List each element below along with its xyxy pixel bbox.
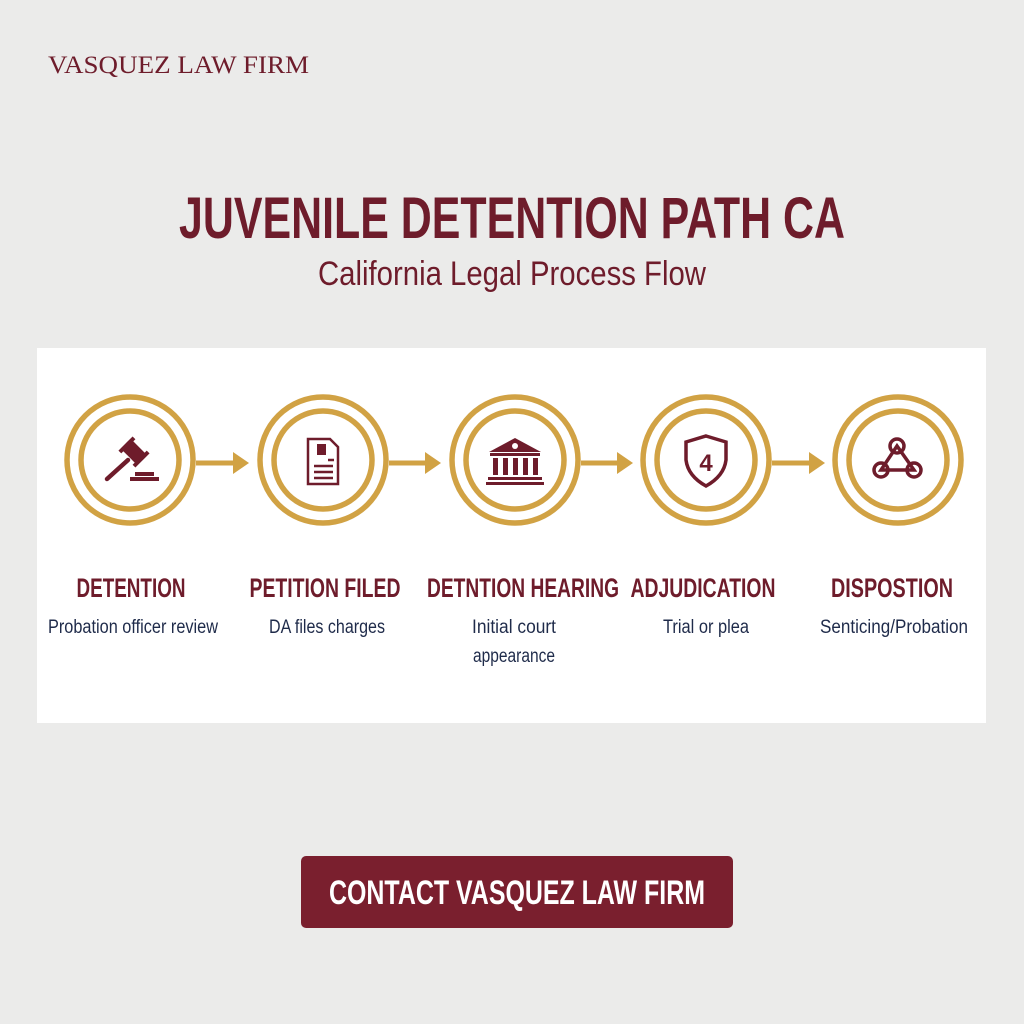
icon: courthouse bbox=[486, 438, 544, 485]
step labels: PETITION FILED bbox=[250, 573, 400, 603]
CTA button: CONTACT VASQUEZ LAW FIRM bbox=[329, 874, 705, 912]
step labels: DISPOSTION bbox=[831, 573, 953, 603]
panel: process flow bbox=[37, 348, 986, 723]
arrows bbox=[196, 452, 825, 474]
CTA button bbox=[301, 856, 733, 928]
step labels: Initial court bbox=[472, 617, 557, 638]
icon: gavel bbox=[107, 436, 159, 481]
step labels: Probation officer review bbox=[48, 617, 218, 638]
step labels: appearance bbox=[473, 646, 555, 667]
step labels: DETNTION HEARING bbox=[427, 573, 619, 603]
step labels: Trial or plea bbox=[663, 617, 749, 638]
icon: document bbox=[308, 439, 338, 484]
icon: shield 4: 4 bbox=[699, 450, 713, 477]
step labels: ADJUDICATION bbox=[630, 573, 776, 603]
step labels: DETENTION bbox=[76, 573, 186, 603]
icon: network triangle bbox=[874, 439, 921, 477]
step labels: DA files charges bbox=[269, 617, 385, 638]
icon: shield 4 bbox=[686, 436, 726, 486]
step labels: Senticing/Probation bbox=[820, 617, 968, 638]
step labels bbox=[48, 573, 968, 667]
brand logo: VASQUEZ LAW FIRM bbox=[48, 52, 309, 79]
step circles bbox=[67, 397, 961, 523]
subtitle: California Legal Process Flow bbox=[318, 255, 706, 293]
